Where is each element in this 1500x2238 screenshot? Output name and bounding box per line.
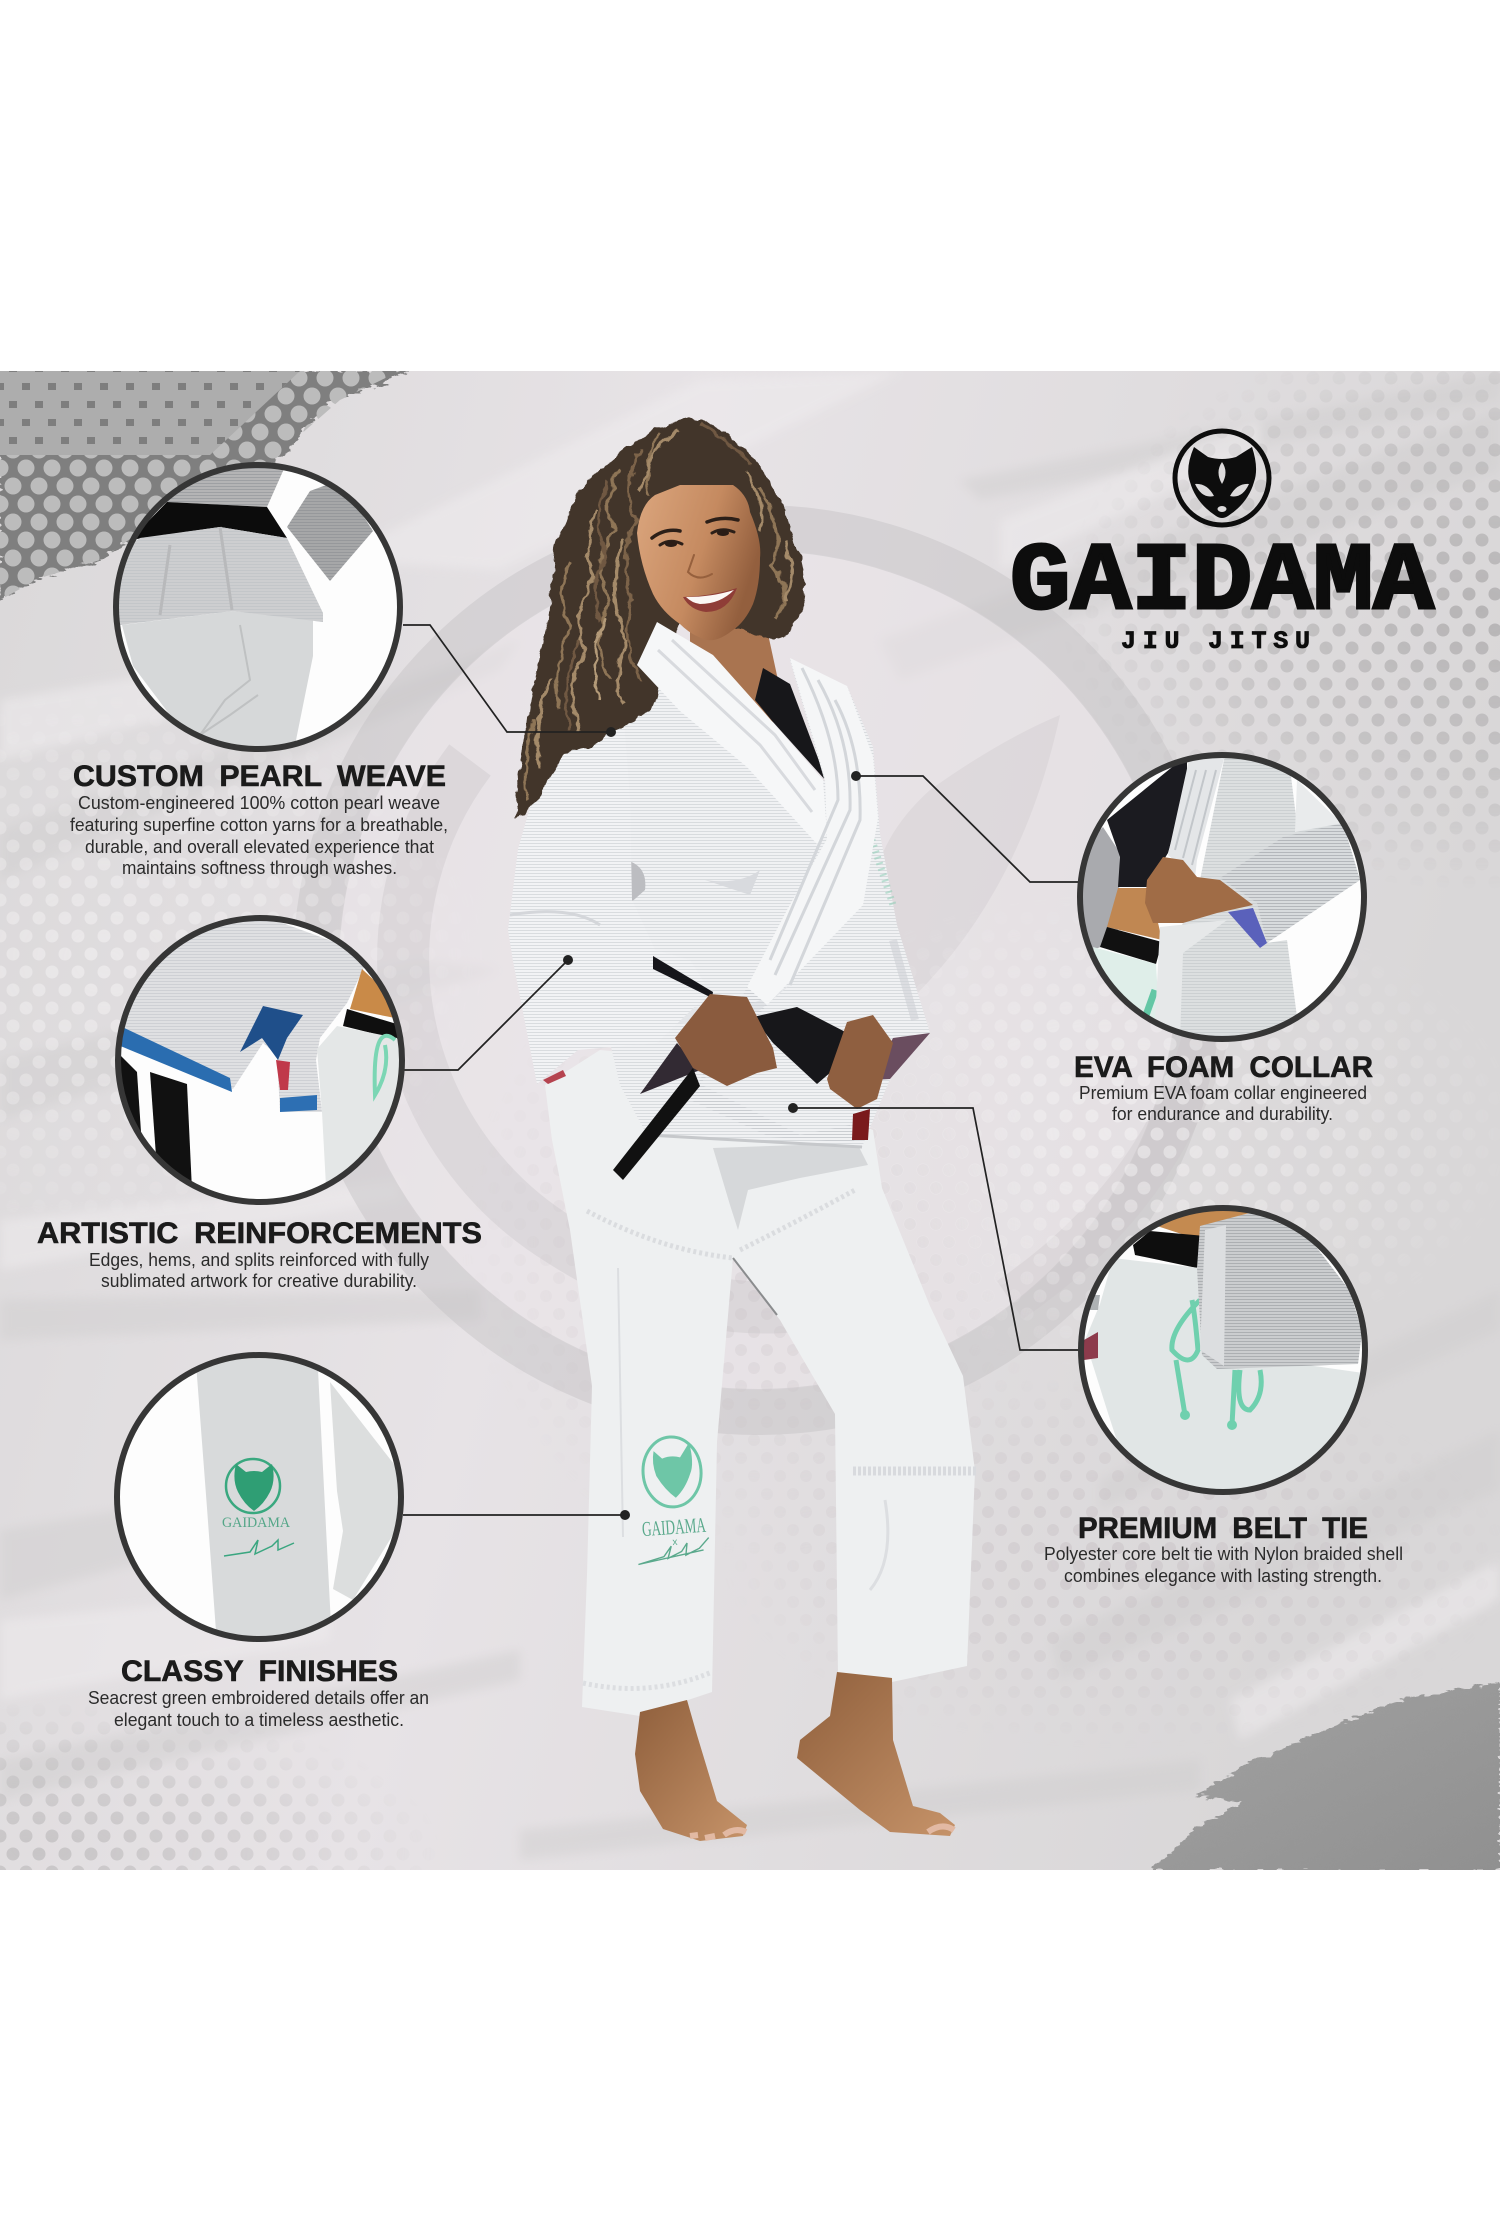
bottom-right grey brush stroke [1150,1682,1500,1871]
pant-leg embroidery: GAIDAMA [641,1513,707,1541]
left sleeve [508,670,710,1084]
description: for endurance and durability. [1112,1103,1333,1124]
description: maintains softness through washes. [122,857,397,878]
detail photo circle: belt tie [1081,1200,1370,1495]
panel: eva foam collar [1074,755,1373,1124]
hair behind and over shoulder [515,418,805,818]
neck and undershirt [690,620,827,782]
description: Custom-engineered 100% cotton pearl weave [78,792,440,813]
panel: artistic reinforcements [37,905,482,1291]
description [1044,1543,1403,1586]
tagline: JIU JITSU [1121,627,1310,656]
description: combines elegance with lasting strength. [1064,1565,1382,1586]
description: Edges, hems, and splits reinforced with fully [89,1249,430,1270]
detail photo circle: sublimated hems [110,905,410,1205]
detail photo circle: embroidered logo: GAIDAMA [222,1515,290,1531]
description: durable, and overall elevated experience that [85,836,434,857]
heading: EVA FOAM COLLAR [1074,1051,1373,1084]
pant-leg embroidery: x [672,1537,678,1548]
pant-leg embroidery [630,1435,710,1564]
brand logo [1010,431,1434,656]
heading: CLASSY FINISHES [121,1655,398,1688]
background panel [0,371,1500,1871]
jacket torso [600,624,930,1147]
feet [635,1672,955,1841]
face [637,485,760,640]
detail photo circle: embroidered logo [117,1350,402,1645]
belt thin upper section [653,956,713,998]
panel: custom pearl weave [70,460,448,878]
description: featuring superfine cotton yarns for a breathable, [70,814,448,835]
heading: CUSTOM PEARL WEAVE [73,760,446,793]
watermark logo ring [316,528,1210,1412]
heading: ARTISTIC REINFORCEMENTS [37,1217,482,1250]
heading: PREMIUM BELT TIE [1078,1512,1368,1545]
halftone dot fields [0,371,1500,1870]
background brush streaks [10,456,1130,1854]
description [88,1687,429,1730]
panel: premium belt tie [1044,1200,1403,1586]
description [70,792,448,878]
description: elegant touch to a timeless aesthetic. [114,1709,404,1730]
description: Polyester core belt tie with Nylon braided shell [1044,1543,1403,1564]
panel: classy finishes [88,1350,429,1730]
wordmark: GAIDAMA [1010,528,1434,637]
person in white gi [508,418,977,1841]
description: Seacrest green embroidered details offer an [88,1687,429,1708]
top-left grey brush stroke with halftone [0,371,408,600]
detail photo circle: pearl weave [114,460,400,755]
description [89,1249,430,1291]
pants [545,1050,977,1716]
description [1079,1082,1367,1124]
black belt and hands [613,994,893,1180]
icon: fox mask emblem [1175,431,1269,525]
collar lapels [637,622,878,1143]
description: sublimated artwork for creative durability. [101,1270,417,1291]
description: Premium EVA foam collar engineered [1079,1082,1367,1103]
callout leader lines and dots [403,625,1079,1520]
detail photo circle: collar [1075,755,1364,1040]
printed cuff linings [640,1033,930,1094]
